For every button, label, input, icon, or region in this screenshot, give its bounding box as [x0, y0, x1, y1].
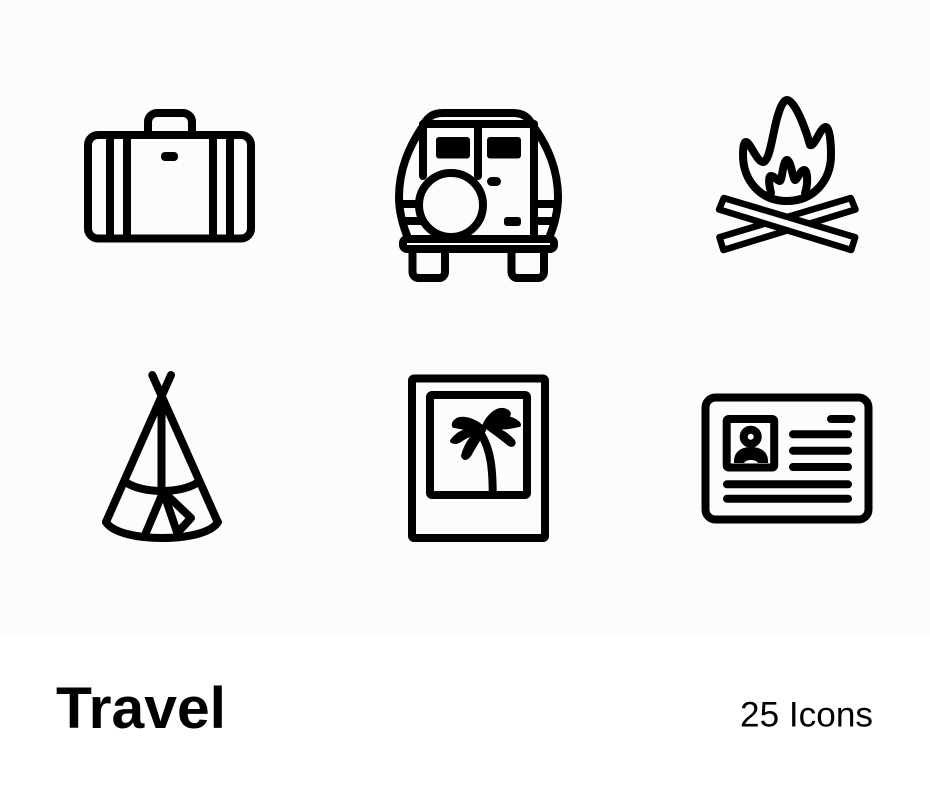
icon: teepee: [106, 375, 218, 538]
icon: van rear view: [399, 113, 558, 278]
icon: suitcase: [88, 113, 251, 238]
icon count: 25 Icons: [740, 696, 873, 734]
title: Travel: [56, 676, 226, 741]
icon: polaroid photo with palm tree: [412, 378, 545, 538]
icon: ID card: [706, 398, 868, 520]
icon: campfire: [719, 100, 856, 250]
